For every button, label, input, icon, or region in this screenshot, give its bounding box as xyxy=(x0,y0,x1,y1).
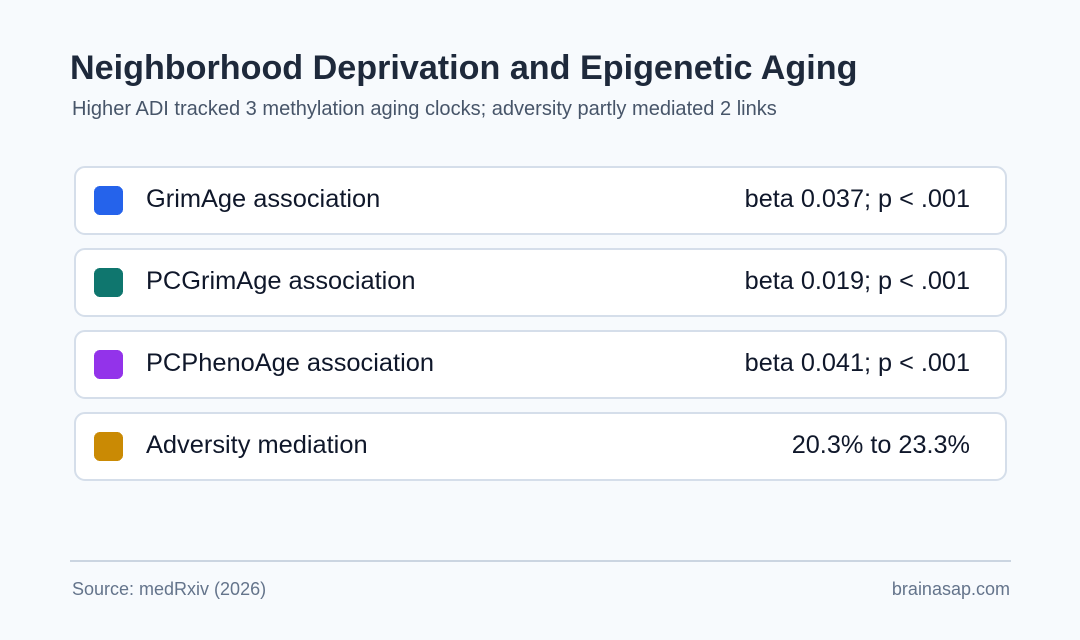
label: PCPhenoAge: PCPhenoAge association xyxy=(146,349,434,377)
source: Source: medRxiv (2026) xyxy=(72,579,266,599)
value: GrimAge: beta 0.037; p < .001 xyxy=(745,185,970,213)
panel: PCGrimAge association xyxy=(75,249,1006,316)
value: PCPhenoAge: beta 0.041; p < .001 xyxy=(745,349,970,377)
title: Neighborhood Deprivation and Epigenetic Aging xyxy=(70,49,857,87)
panel: PCPhenoAge association xyxy=(75,331,1006,398)
value: PCGrimAge: beta 0.019; p < .001 xyxy=(745,267,970,295)
label: GrimAge: GrimAge association xyxy=(146,185,380,213)
panel: GrimAge association xyxy=(75,167,1006,234)
icon: blue square xyxy=(94,186,123,215)
panel: Adversity mediation xyxy=(75,413,1006,480)
subtitle: Higher ADI tracked 3 methylation aging clocks; adversity partly mediated 2 links xyxy=(72,98,777,120)
icon: teal square xyxy=(94,268,123,297)
label: PCGrimAge: PCGrimAge association xyxy=(146,267,416,295)
icon: purple square xyxy=(94,350,123,379)
value: Adversity: 20.3% to 23.3% xyxy=(792,431,970,459)
label: Adversity: Adversity mediation xyxy=(146,431,368,459)
icon: amber square xyxy=(94,432,123,461)
site credit: brainasap.com xyxy=(892,579,1010,599)
